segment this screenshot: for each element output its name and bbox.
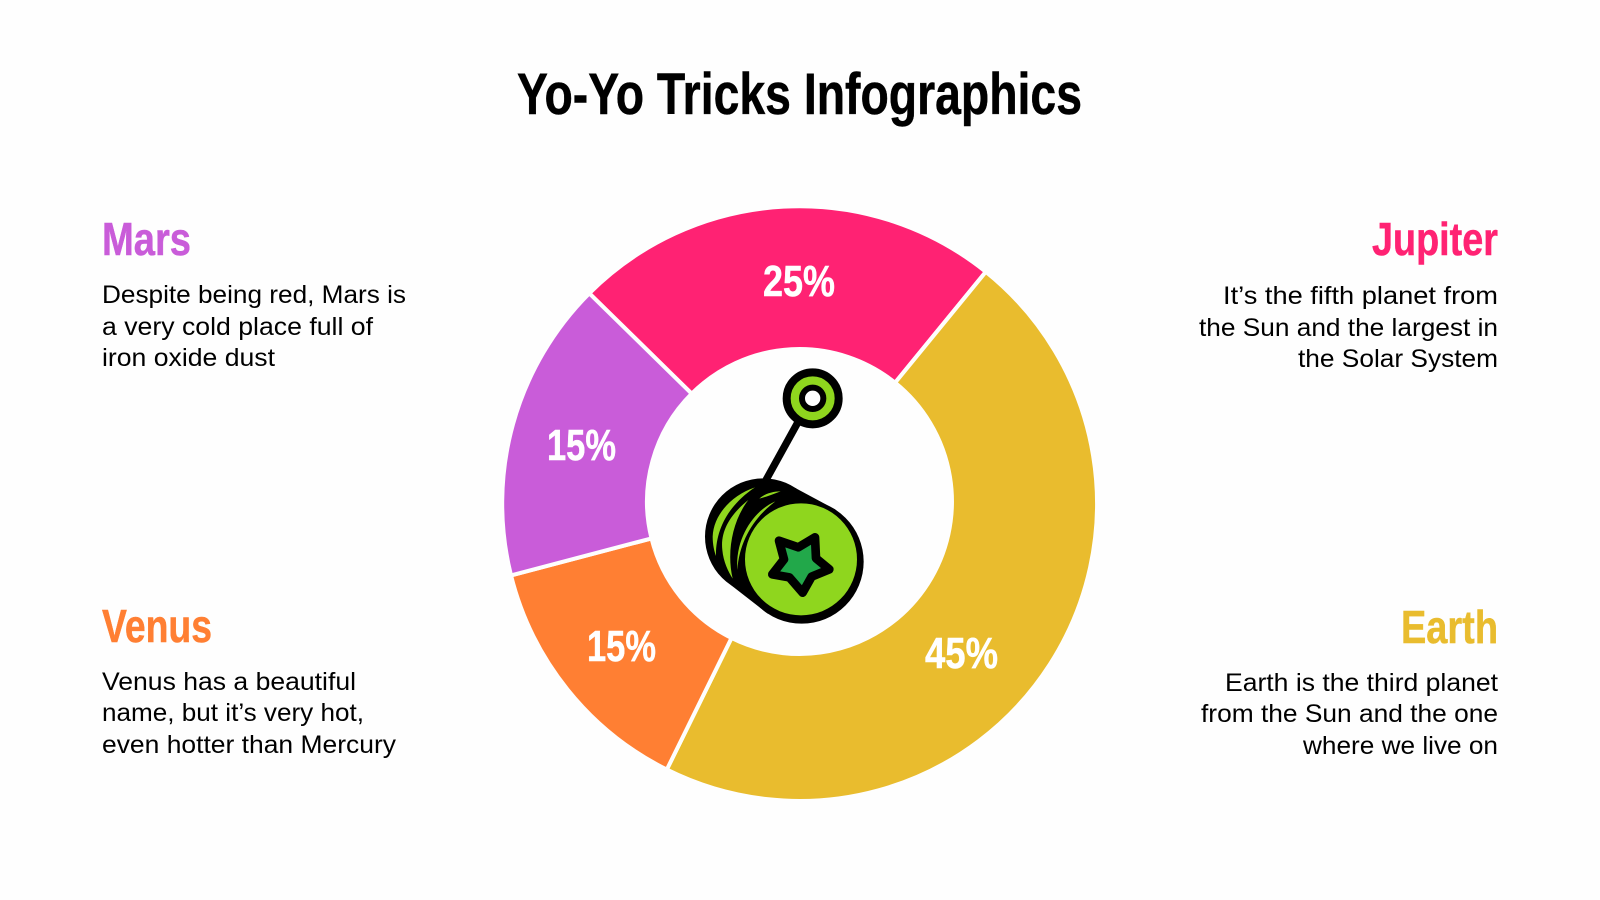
description: Earth: from the Sun and the one xyxy=(1201,700,1498,728)
string xyxy=(766,423,797,480)
text block: Mars xyxy=(102,213,406,372)
segment: Earth 45% xyxy=(667,272,1097,801)
yo-yo body xyxy=(705,478,864,624)
description: Earth: Earth is the third planet xyxy=(1225,669,1498,697)
description: Mars xyxy=(102,281,406,372)
segment: Mars 15% xyxy=(502,293,692,575)
description: Venus: name, but it’s very hot, xyxy=(102,699,364,727)
label: Mars 15%: 15% xyxy=(547,421,616,470)
label: Venus 15%: 15% xyxy=(587,622,656,671)
heading: Jupiter: Jupiter xyxy=(1372,213,1498,265)
star xyxy=(772,537,829,593)
label: 25%: 25% xyxy=(763,257,835,306)
description: Earth xyxy=(1201,669,1498,760)
heading: Earth: Earth xyxy=(1401,601,1498,653)
description: Mars: Despite being red, Mars is xyxy=(102,281,406,309)
description: Venus: Venus has a beautiful xyxy=(102,668,356,696)
segment: Jupiter 25% xyxy=(589,206,986,394)
string grooves xyxy=(713,487,781,579)
description: Mars: a very cold place full of xyxy=(102,313,373,341)
text block: Earth xyxy=(1201,601,1498,760)
finger loop xyxy=(787,372,839,424)
description: Venus xyxy=(102,668,397,759)
description: Mars: iron oxide dust xyxy=(102,344,275,372)
yo-yo face xyxy=(745,503,857,615)
icon: yo-yo xyxy=(705,372,864,624)
heading: Mars: Mars xyxy=(102,213,191,265)
title: Yo-Yo Tricks Infographics xyxy=(517,62,1082,127)
text block: Venus xyxy=(102,600,397,759)
description: Jupiter xyxy=(1199,282,1498,373)
label: 45%: 45% xyxy=(925,629,998,678)
description: Jupiter: the Solar System xyxy=(1298,345,1498,373)
description: Jupiter: It’s the fifth planet from xyxy=(1223,282,1498,310)
description: Earth: where we live on xyxy=(1302,732,1498,760)
text block: Jupiter xyxy=(1199,213,1498,373)
description: Venus: even hotter than Mercury xyxy=(102,731,397,759)
description: Jupiter: the Sun and the largest in xyxy=(1199,314,1498,342)
heading: Venus: Venus xyxy=(102,600,212,652)
segment: Venus 15% xyxy=(511,538,732,770)
donut chart xyxy=(502,206,1097,801)
